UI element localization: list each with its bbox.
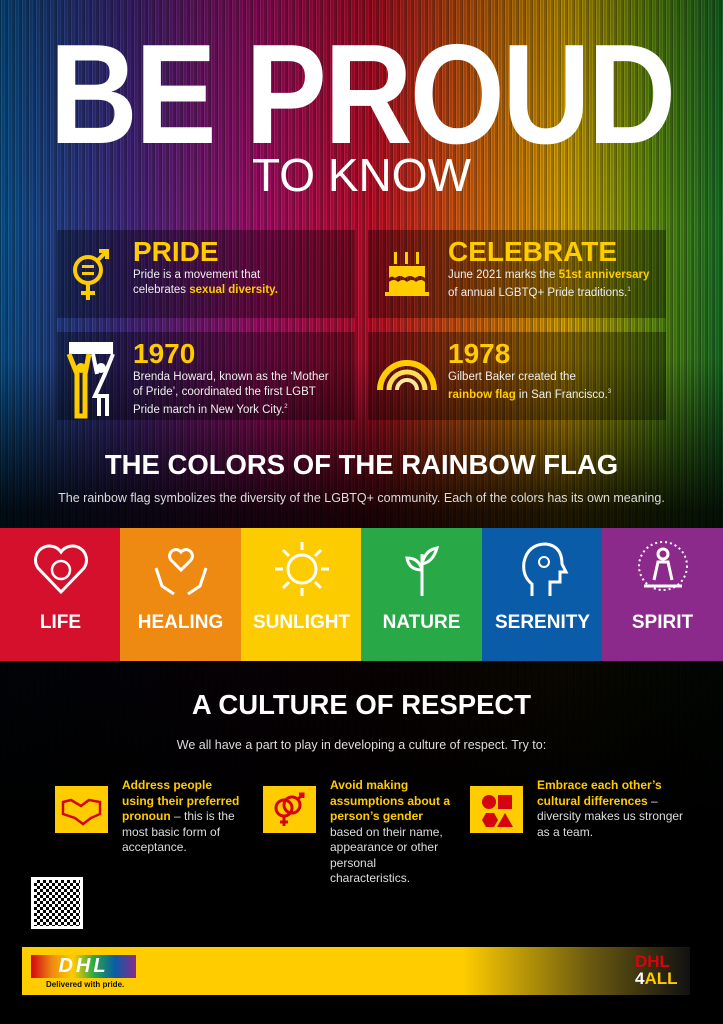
column: sunlight: [241, 528, 362, 661]
logo: DHL4ALL: DHL: [635, 952, 670, 971]
icon: gender symbol: [73, 249, 109, 300]
panel: 1978: [368, 332, 666, 420]
item: gender: [263, 778, 450, 885]
panel: 1970: [57, 332, 355, 420]
logo: DHL: DHL: [58, 955, 109, 977]
column: healing: [120, 528, 241, 661]
panel: 1970: Brenda Howard, known as the ‘Mother: [133, 371, 329, 383]
text: culture intro: We all have a part to play in developing a culture of respect. Try to:: [177, 738, 546, 752]
item: cultural: [470, 778, 683, 838]
panel: pride: [57, 230, 355, 318]
panel: 1978: Gilbert Baker created the: [448, 371, 576, 383]
heading: culture: A CULTURE OF RESPECT: [192, 689, 531, 720]
column: sunlight: SUNLIGHT: [253, 612, 350, 633]
column: healing: HEALING: [138, 612, 223, 633]
heading: rainbow flag: THE COLORS OF THE RAINBOW FLAG: [105, 449, 618, 480]
panel: 1978: rainbow flag in San Francisco.3: [448, 389, 611, 401]
icon: cake: [385, 252, 429, 296]
icon: handshake: [55, 786, 108, 833]
panel: 1970: 1970: [133, 338, 195, 369]
panel: pride: Pride is a movement that: [133, 269, 260, 281]
item: cultural: Embrace each other’s cultural differences – diversity makes us stronger as a team.: [537, 778, 683, 838]
panel: pride: celebrates sexual diversity.: [133, 284, 278, 296]
panel: 1970: Pride march in New York City.2: [133, 404, 288, 416]
item: pronoun: [55, 778, 239, 854]
item: gender: Avoid making assumptions about a person’s gender based on their name, appearance or other personal characteristics.: [330, 778, 450, 885]
panel: celebrate: of annual LGBTQ+ Pride traditions.1: [448, 287, 631, 299]
footer bar: [22, 947, 690, 995]
panel: celebrate: CELEBRATE: [448, 236, 617, 267]
tagline: Delivered with pride.: [46, 980, 124, 989]
color strip: [0, 528, 723, 661]
logo: DHL4ALL: [635, 952, 678, 988]
column: serenity: SERENITY: [495, 612, 590, 633]
panel: pride: PRIDE: [133, 236, 219, 267]
column: spirit: [602, 528, 723, 661]
column: nature: [361, 528, 482, 661]
column: spirit: SPIRIT: [632, 612, 693, 633]
item: pronoun: Address people using their preferred pronoun – this is the most basic form of acceptance.: [122, 778, 239, 854]
panel: celebrate: [368, 230, 666, 318]
column: life: LIFE: [40, 612, 81, 633]
column: life: [0, 528, 121, 661]
icon: rainbow: [377, 360, 437, 390]
panel: 1970: of Pride’, coordinated the first LGBT: [133, 386, 316, 398]
text: flag intro: The rainbow flag symbolizes the diversity of the LGBTQ+ community. Each of the colors has its own meaning.: [58, 491, 665, 505]
QR code: [31, 877, 83, 929]
title: BE PROUD: [50, 15, 673, 174]
logo: DHL: [31, 955, 136, 978]
panel: 1978: 1978: [448, 338, 510, 369]
subtitle: TO KNOW: [252, 149, 471, 201]
icon: shapes: [470, 786, 523, 833]
icon: gender symbols: [263, 786, 316, 833]
column: serenity: [482, 528, 603, 661]
panel: celebrate: June 2021 marks the 51st anniversary: [448, 269, 649, 281]
icon: marchers: [66, 342, 115, 418]
column: nature: NATURE: [383, 612, 460, 633]
logo: DHL4ALL: 4ALL: [635, 969, 678, 988]
